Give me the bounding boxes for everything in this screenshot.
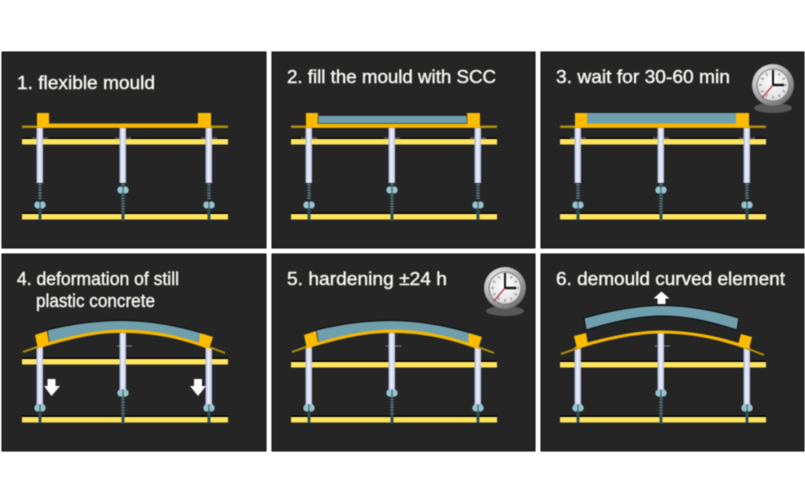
panel 4: deformation [2, 254, 266, 451]
concrete layer 2 [318, 116, 467, 124]
panel 6: demould [541, 254, 804, 451]
empty curved mould 6 [561, 332, 764, 355]
arrow: left down [44, 379, 60, 396]
arrow: right down [190, 379, 206, 396]
panel 1: flexible mould [2, 52, 266, 248]
demoulded curved concrete element [584, 306, 739, 330]
panel 3: wait [541, 52, 804, 248]
rods and lower beam 4 [22, 333, 228, 424]
upper beam 6 [560, 360, 766, 368]
upper beam 4 [22, 358, 228, 364]
curved mould with concrete 5 [292, 320, 494, 353]
mould and supports 2 [291, 113, 497, 221]
curved mould with concrete 4 [23, 320, 225, 353]
heading 1: 1. flexible mould [17, 72, 155, 93]
heading 3: 3. wait for 30-60 min [556, 66, 730, 87]
heading 4: plastic concrete [36, 290, 155, 311]
rods and lower beam 5 [291, 333, 497, 424]
panel 2: fill the mould [272, 52, 535, 248]
arrow: up [654, 292, 670, 304]
concrete layer 3 [587, 113, 736, 124]
heading 4: 4. deformation of still [17, 268, 179, 289]
mould and supports 1 [22, 113, 228, 221]
heading 5: 5. hardening ±24 h [287, 268, 447, 289]
heading 6: 6. demould curved element [556, 268, 785, 289]
icon: clock 5 [484, 267, 526, 316]
mould and supports 3 [560, 113, 766, 221]
heading 2: 2. fill the mould with SCC [287, 66, 496, 87]
upper beam 5 [291, 360, 497, 368]
rods and lower beam 6 [560, 333, 766, 424]
panel 5: hardening [272, 254, 535, 451]
icon: clock 3 [752, 64, 794, 113]
